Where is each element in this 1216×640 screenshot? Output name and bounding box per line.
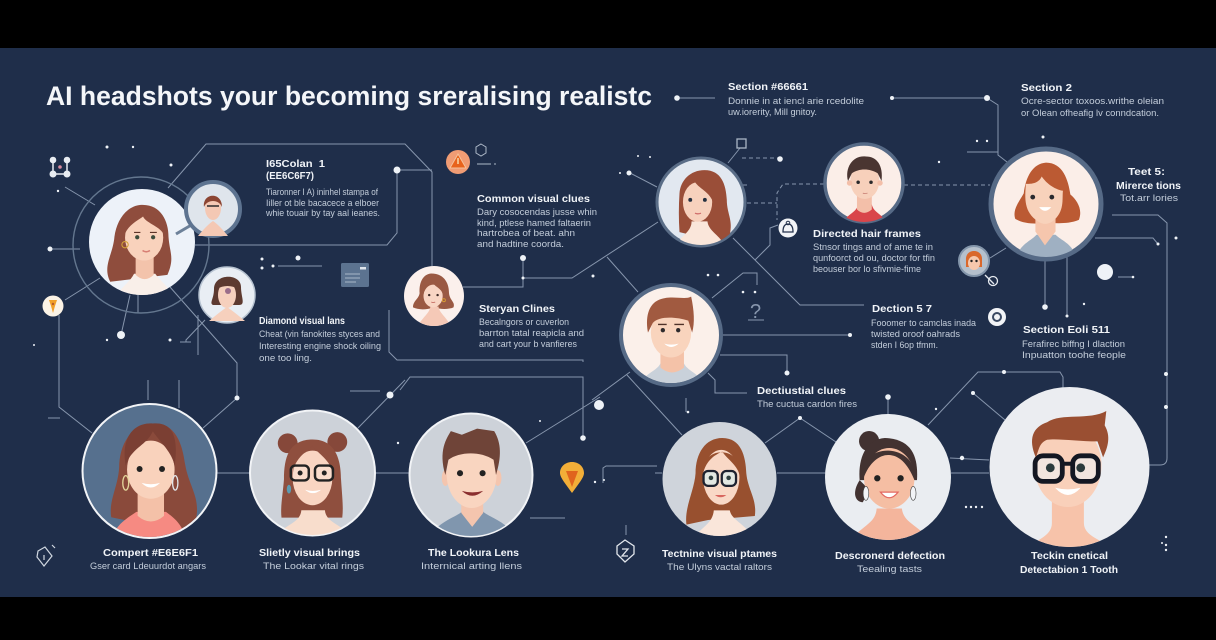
text block: steryan clues: Becalngors or cuverlon — [479, 317, 569, 328]
caption: teckin: Teckin cnetical — [1031, 550, 1108, 562]
icon: network — [50, 157, 70, 177]
text block: dection 5: Dection 5 7 — [872, 303, 932, 315]
text block: directed hair frames: Stnsor tings and of ame te in — [813, 242, 933, 253]
text block: common visual clues: Dary cosocendas jusse whin — [477, 207, 597, 218]
text block: section 2: or Olean ofheafig lv conndcation. — [1021, 108, 1159, 119]
text block: common visual clues: kind, ptlese hamed faltaerin — [477, 218, 591, 229]
icon: hexagon ring — [476, 144, 499, 164]
caption: slietly — [259, 547, 364, 572]
text block: common visual clues: and hadtine coorda. — [477, 239, 564, 250]
portrait: bottom man 2 glasses — [990, 387, 1150, 555]
text block: teet 5: Teet 5: — [1128, 166, 1165, 178]
caption: tectnine — [662, 548, 777, 573]
caption: descronerd: Teealing tasts — [857, 564, 922, 575]
caption: compert — [90, 547, 206, 572]
text block: teet 5 — [1116, 166, 1181, 204]
text block: dectiustial clues: The cuctua cardon fires — [757, 399, 857, 410]
text block: diamond visual lans: one too ling. — [259, 353, 312, 364]
scatter dots — [33, 95, 1178, 551]
caption: slietly: The Lookar vital rings — [263, 561, 364, 572]
text block: dectiustial clues: Dectiustial clues — [757, 385, 846, 397]
text block: diamond visual lans: Diamond visual lans — [259, 315, 345, 327]
text block: common visual clues: hartrobea of beat. ahn — [477, 228, 575, 239]
text block: dectiustial clues — [757, 385, 857, 410]
icon: bolt pin — [42, 296, 64, 316]
icon: lock badge — [778, 218, 798, 238]
text block: directed hair frames: qunfoorct od ou, doctor for tfin — [813, 253, 935, 264]
caption: slietly: Slietly visual brings — [259, 547, 360, 559]
text block: steryan clues: and cart your b vanfieres — [479, 339, 577, 350]
portrait: man top right — [825, 144, 903, 226]
question mark: ? — [750, 301, 761, 323]
text block: diamond visual lans: Cheat (vin fanokites styces and — [259, 329, 380, 340]
portrait: woman top centre — [657, 158, 745, 249]
caption: lookura lens: Internical arting llens — [421, 561, 522, 572]
text block: section 1: whie touair by tay aal ieanes. — [265, 208, 380, 219]
text block: section #66661: uw.iorerity, Mill gnitoy. — [728, 107, 817, 118]
text block: dection 5: twisted oroof oahrads — [871, 329, 960, 340]
caption: lookura lens: The Lookura Lens — [428, 547, 519, 559]
text block: directed hair frames: beouser bor lo sfivmie-fime — [813, 264, 921, 275]
text block: section eoli 511: Inpuatton toohe feople — [1022, 350, 1126, 361]
portrait: main woman — [89, 189, 195, 306]
portrait: small woman — [199, 267, 255, 323]
icon: orange pin — [560, 462, 584, 493]
caption: compert: Compert #E6E6F1 — [103, 547, 198, 559]
text block: steryan clues: barrton tatal reapicla and — [479, 328, 584, 339]
text block: dection 5: Fooomer to camclas inada — [871, 318, 977, 329]
text block: section 1: (EE6C6F7) — [266, 170, 314, 182]
text block: section #66661: Section #66661 — [728, 81, 808, 93]
icon: card — [341, 263, 369, 287]
text block: section 1 — [265, 158, 380, 219]
text block: common visual clues: Common visual clues — [477, 193, 590, 205]
text block: section 1: Iiller ot ble bacacece a elboer — [266, 198, 379, 209]
portrait: woman centre-left — [404, 266, 464, 329]
text block: diamond visual lans: Interesting engine shock oiling — [259, 341, 381, 352]
portrait: man centre — [621, 285, 721, 388]
caption: tectnine: Tectnine visual ptames — [662, 548, 777, 560]
portrait: small magnified face — [176, 182, 240, 236]
icon: warning — [446, 150, 470, 174]
text block: dection 5: stden I 6op tfmm. — [871, 340, 938, 351]
caption: lookura lens — [421, 547, 522, 572]
text block: steryan clues: Steryan Clines — [479, 303, 555, 315]
text block: directed hair frames — [813, 228, 935, 275]
text block: section #66661: Donnie in at iencl arie rcedolite — [728, 96, 864, 107]
ring: main portrait orbit — [73, 177, 209, 313]
connector network — [48, 98, 1167, 535]
portrait: tiny red hair — [959, 246, 989, 276]
text block: section 1: Tiaronner I A) ininhel stampa of — [266, 187, 378, 198]
text block: section eoli 511 — [1022, 324, 1126, 361]
text block: common visual clues — [477, 193, 597, 250]
text block: dection 5 — [871, 303, 977, 351]
text block: directed hair frames: Directed hair frames — [813, 228, 921, 240]
title: AI headshots your becoming sreralising realistc — [46, 81, 652, 111]
icon: tool — [985, 275, 998, 286]
text block: diamond visual lans — [259, 315, 381, 364]
text block: steryan clues — [479, 303, 584, 350]
text block: section 2 — [1021, 82, 1164, 119]
text block: section 2: Section 2 — [1021, 82, 1072, 94]
text block: section eoli 511: Section Eoli 511 — [1023, 324, 1110, 336]
caption: descronerd — [835, 550, 945, 575]
icon: house outline — [37, 545, 55, 566]
portrait: bottom woman 4 bun — [825, 414, 951, 546]
portrait: bottom woman 1 — [82, 404, 216, 544]
caption: descronerd: Descronerd defection — [835, 550, 945, 562]
text block: teet 5: Tot.arr lories — [1120, 193, 1178, 204]
caption: compert: Gser card Ldeuurdot angars — [90, 561, 206, 572]
caption: teckin — [1020, 550, 1118, 576]
icon: shield — [617, 540, 634, 562]
text block: teet 5: Mirerce tions — [1116, 180, 1181, 192]
text block: section #66661 — [728, 81, 864, 118]
icon: target badge — [988, 308, 1006, 326]
portrait: bottom man 1 — [410, 414, 532, 542]
portrait: bottom woman 2 glasses — [250, 410, 375, 541]
portrait: bottom woman 3 glasses — [662, 422, 776, 542]
caption: tectnine: The Ulyns vactal raltors — [667, 562, 772, 573]
text block: section 2: Ocre-sector toxoos.writhe oleian — [1021, 96, 1164, 107]
portrait: woman red hair — [991, 149, 1101, 260]
caption: teckin: Detectabion 1 Tooth — [1020, 564, 1118, 576]
icon: square node — [737, 139, 746, 148]
text block: section 1: I65Colan 1 — [266, 158, 325, 170]
text block: section eoli 511: Ferafirec biffng I dlaction — [1022, 339, 1125, 350]
